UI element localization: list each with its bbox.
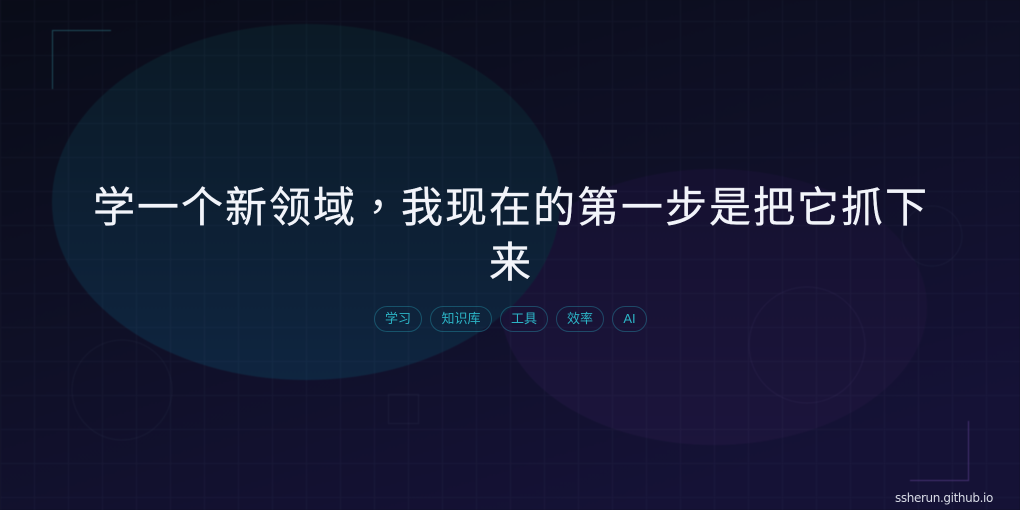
footer URL: ssherun.github.io	[895, 491, 993, 505]
tag: 学习: 学习	[385, 311, 411, 326]
glow: purple ellipse	[501, 169, 927, 445]
corner bracket: bottom right	[910, 421, 968, 480]
tag: AI	[612, 306, 647, 332]
tag: 工具: 工具	[511, 311, 537, 326]
decorative circle: lower left	[72, 340, 172, 440]
decorative circle: right	[902, 206, 962, 266]
title: 学一个新领域，我现在的第一步是把它抓下来	[93, 174, 929, 290]
decorative circle: lower right	[749, 287, 865, 403]
tag: 效率: 效率	[567, 311, 593, 326]
tag: 知识库	[430, 306, 492, 332]
tag: 知识库: 知识库	[441, 311, 480, 326]
tag: AI: AI	[623, 311, 636, 326]
tag: 学习	[374, 306, 422, 332]
decorative square	[388, 394, 418, 424]
tags row	[374, 306, 647, 332]
corner bracket: top left	[52, 30, 111, 89]
tag: 效率	[556, 306, 604, 332]
glow: teal ellipse	[52, 24, 560, 380]
tag: 工具	[500, 306, 548, 332]
